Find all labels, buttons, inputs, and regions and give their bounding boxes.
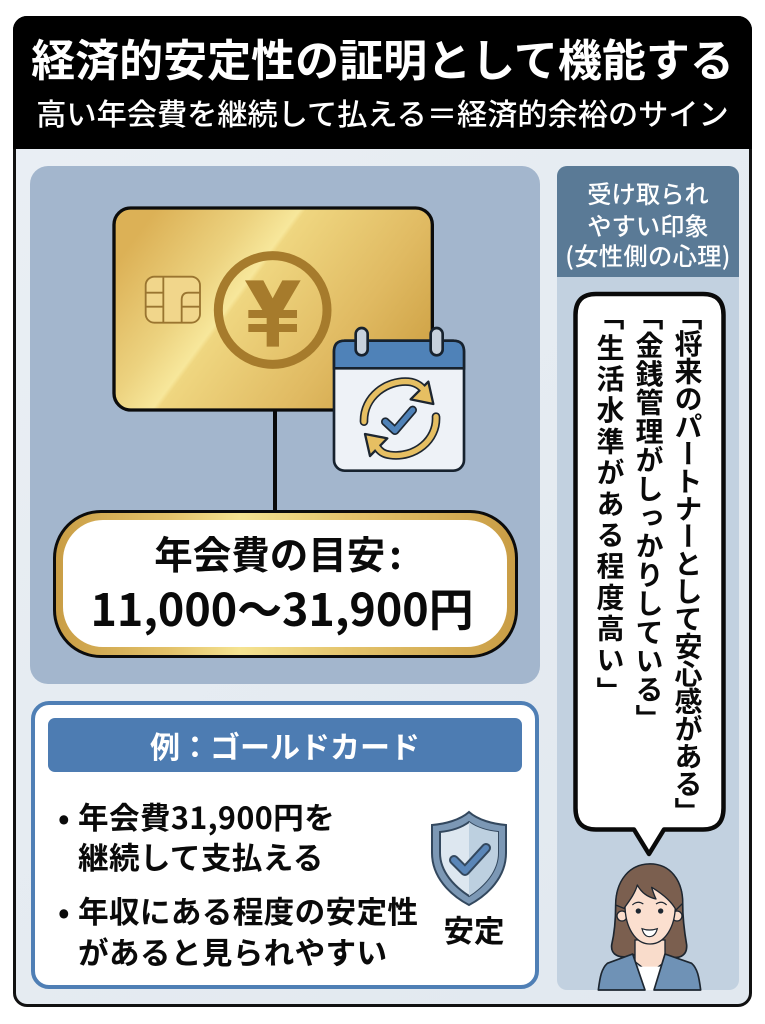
icon: shield — [431, 810, 507, 906]
icon: check mark — [385, 410, 413, 431]
stable label: 安定 — [444, 907, 504, 951]
icon: woman — [598, 863, 702, 991]
quote 3: 「生活水準がある程度高い」 — [590, 302, 630, 708]
bullet 2 — [58, 888, 418, 973]
example heading — [48, 718, 522, 772]
icon: renewal arrows — [364, 382, 436, 456]
column heading: (女性側の心理) — [565, 237, 731, 272]
icon: calendar — [334, 328, 464, 471]
panel: annual fee — [30, 166, 540, 684]
panel: impression column — [557, 166, 739, 990]
connector line — [273, 405, 277, 515]
header band — [13, 16, 752, 149]
gold card — [114, 208, 432, 410]
column heading — [557, 166, 739, 277]
column heading: 受け取られ — [587, 175, 709, 210]
panel: example gold card — [31, 701, 539, 989]
icon: yen coin — [218, 256, 327, 364]
annual fee pill — [53, 510, 518, 658]
quote 1: 「将来のパートナーとして安心感がある」 — [668, 302, 708, 824]
fee label: 年会費の目安: — [154, 525, 402, 581]
bullet 2: • — [58, 888, 70, 932]
pill inner — [63, 520, 507, 647]
bullet 2: があると見られやすい — [78, 929, 387, 973]
fee range: 11,000〜31,900円 — [90, 574, 474, 639]
bullet 1: 年会費31,900円を — [78, 794, 335, 838]
icon: chip — [146, 277, 200, 323]
column heading: やすい印象 — [587, 207, 709, 242]
speech bubble — [573, 292, 726, 856]
example heading: 例：ゴールドカード — [150, 723, 420, 767]
quote 2: 「金銭管理がしっかりしている」 — [630, 302, 670, 732]
title: 経済的安定性の証明として機能する — [31, 25, 734, 89]
illustration: gold card with calendar — [112, 206, 466, 472]
bullet 2: 年収にある程度の安定性 — [78, 888, 418, 932]
bullet 1: 継続して支払える — [78, 834, 324, 878]
subtitle: 高い年会費を継続して払える＝経済的余裕のサイン — [36, 90, 729, 134]
bullet 1: • — [58, 794, 70, 838]
bubble text — [590, 302, 708, 824]
bullet 1 — [58, 794, 335, 878]
